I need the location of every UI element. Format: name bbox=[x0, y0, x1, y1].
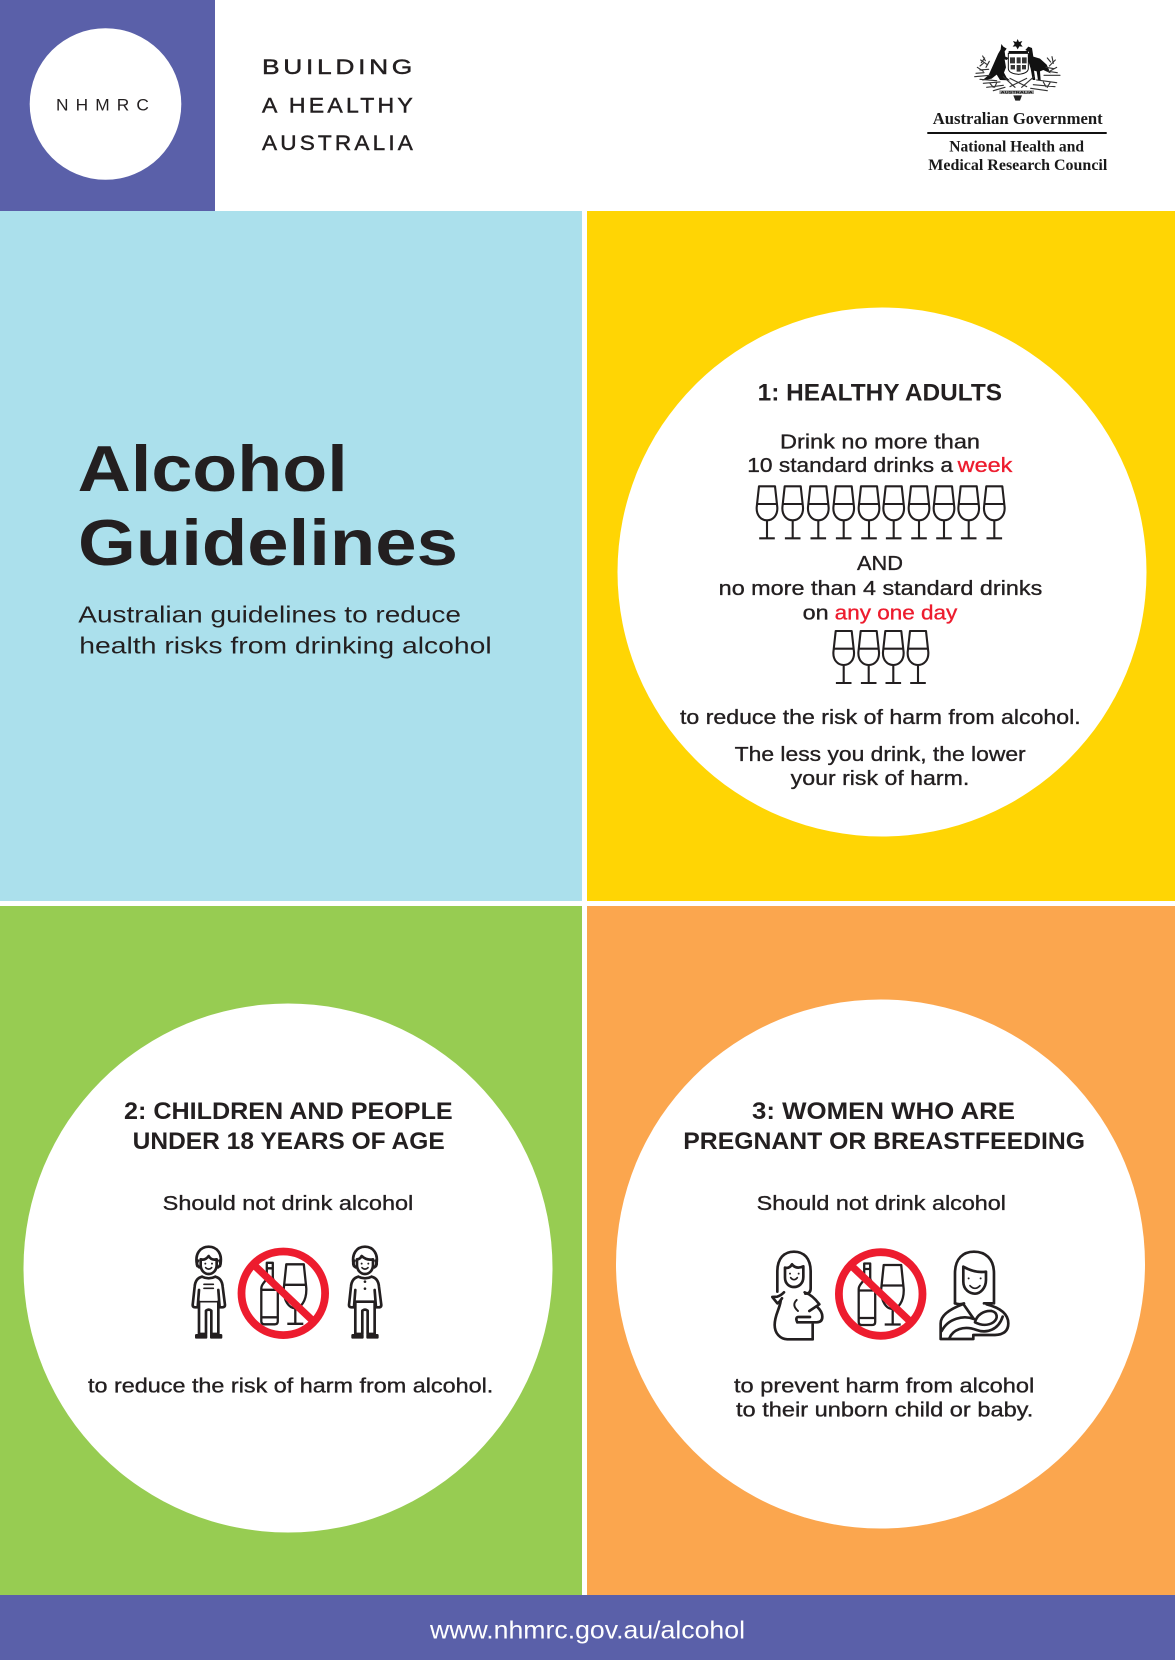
closing text: The less you drink, the lower bbox=[735, 743, 1026, 766]
closing text: your risk of harm. bbox=[791, 767, 969, 790]
emu bbox=[1025, 47, 1051, 80]
closing text bbox=[734, 1375, 1034, 1422]
panel: 3 women bbox=[587, 906, 1175, 1595]
government wordmark: Medical Research Council bbox=[928, 157, 1108, 174]
icon: no alcohol bbox=[241, 1252, 325, 1335]
icons: four wine glasses bbox=[833, 631, 928, 683]
heading 2 bbox=[124, 1098, 453, 1155]
closing text: to their unborn child or baby. bbox=[736, 1399, 1033, 1422]
NHMRC logo block: NHMRC bbox=[56, 96, 156, 114]
weekly limit text: Drink no more than bbox=[780, 430, 980, 453]
weekly limit text bbox=[747, 430, 1013, 477]
tagline: building a healthy australia: BUILDING bbox=[262, 55, 416, 79]
weekly limit text: week bbox=[957, 454, 1013, 477]
daily limit text: AND bbox=[857, 552, 903, 575]
icon: no alcohol bbox=[839, 1252, 922, 1336]
daily limit text: no more than 4 standard drinks bbox=[719, 577, 1042, 600]
heading bbox=[78, 432, 458, 579]
star bbox=[1013, 39, 1023, 49]
heading 2: 2: CHILDREN AND PEOPLE bbox=[124, 1098, 453, 1125]
tagline: building a healthy australia: AUSTRALIA bbox=[262, 131, 416, 155]
closing text: to reduce the risk of harm from alcohol. bbox=[88, 1375, 493, 1398]
statement: Should not drink alcohol bbox=[757, 1192, 1006, 1215]
statement: Should not drink alcohol bbox=[163, 1192, 413, 1215]
icon: boy bbox=[193, 1247, 225, 1337]
icon: pregnant woman bbox=[772, 1252, 822, 1339]
kangaroo bbox=[982, 44, 1010, 81]
daily limit text bbox=[719, 552, 1042, 624]
government wordmark bbox=[927, 109, 1108, 174]
weekly limit text: 10 standard drinks a bbox=[747, 454, 954, 477]
heading: Alcohol bbox=[78, 432, 348, 505]
closing text: to prevent harm from alcohol bbox=[734, 1375, 1034, 1398]
heading: Guidelines bbox=[78, 506, 458, 579]
panel: 1 healthy adults bbox=[587, 211, 1175, 901]
daily limit text: on bbox=[803, 601, 829, 624]
tagline: building a healthy australia bbox=[262, 55, 416, 155]
heading 2: UNDER 18 YEARS OF AGE bbox=[133, 1128, 445, 1155]
Australian Government crest bbox=[975, 39, 1060, 101]
motto banner: AUSTRALIA bbox=[1001, 90, 1034, 94]
closing text: to reduce the risk of harm from alcohol. bbox=[680, 706, 1081, 729]
heading 1: 1: HEALTHY ADULTS bbox=[758, 380, 1002, 407]
daily limit text: any one day bbox=[835, 601, 958, 624]
government wordmark: National Health and bbox=[949, 139, 1084, 156]
heading 3: 3: WOMEN WHO ARE bbox=[752, 1098, 1015, 1125]
NHMRC logo block bbox=[0, 0, 215, 211]
icon: girl bbox=[349, 1247, 381, 1337]
closing text bbox=[680, 706, 1081, 790]
government wordmark: Australian Government bbox=[933, 109, 1103, 128]
heading 3: PREGNANT OR BREASTFEEDING bbox=[683, 1128, 1085, 1155]
heading 3 bbox=[683, 1098, 1085, 1155]
icons: ten wine glasses bbox=[757, 486, 1005, 538]
footer band: www.nhmrc.gov.au/alcohol bbox=[429, 1616, 745, 1644]
shield bbox=[1008, 51, 1028, 74]
tagline: building a healthy australia: A HEALTHY bbox=[262, 93, 416, 117]
footer band bbox=[0, 1595, 1175, 1660]
icon: breastfeeding mother bbox=[941, 1252, 1008, 1339]
panel: 2 children bbox=[0, 906, 582, 1595]
header band bbox=[0, 0, 1175, 211]
subtitle: Australian guidelines to reduce bbox=[78, 601, 461, 627]
panel: title bbox=[0, 211, 582, 901]
subtitle bbox=[78, 601, 492, 658]
wattle sprays bbox=[975, 56, 1060, 91]
subtitle: health risks from drinking alcohol bbox=[79, 632, 492, 658]
